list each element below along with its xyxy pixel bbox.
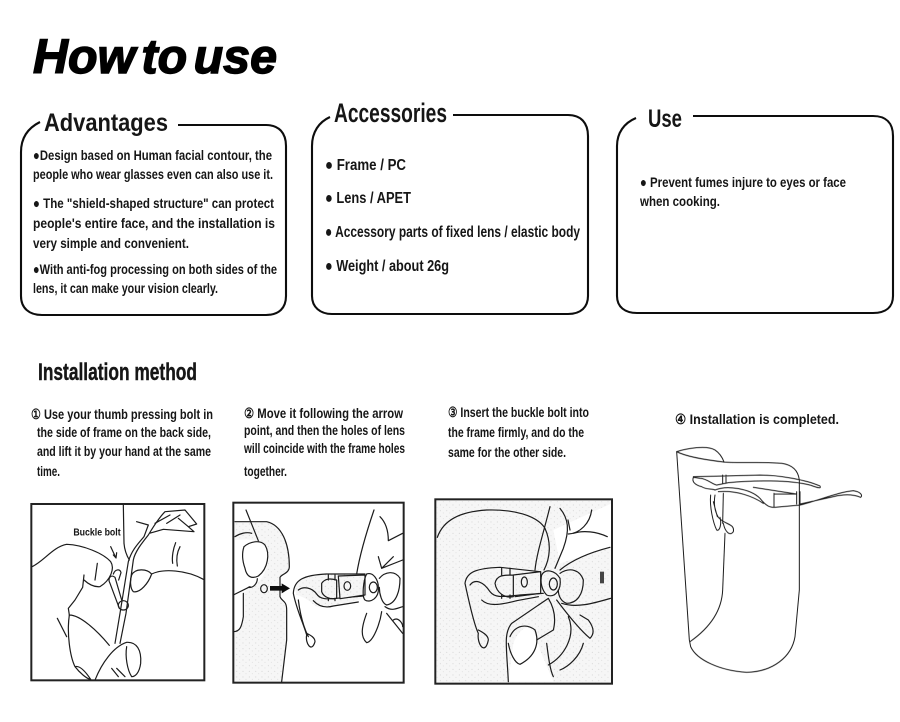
text block: step 3: ③ Insert the buckle bolt into [448,404,589,420]
text block: advantages list: people's entire face, and the installation is [33,215,275,231]
text block: step 1: and lift it by your hand at the same [37,443,211,459]
text block: step 2: ② Move it following the arrow [244,405,403,421]
text block: advantages list: ●Design based on Human facial contour, the [33,147,272,163]
text block: use description: when cooking. [639,193,720,209]
illustration: step 1 thumb pressing bolt [31,504,204,680]
text block: step 2: will coincide with the frame holes [243,440,405,456]
heading: installation method: Installation method [38,359,197,386]
panel: use [617,105,893,313]
text block: advantages list [33,147,277,296]
text block: step 4: ④ Installation is completed. [675,411,839,427]
text block: advantages list: ● The "shield-shaped structure" can protect [33,195,274,211]
text block: advantages list: people who wear glasses even can also use it. [33,166,273,182]
text block: step 3: the frame firmly, and do the [448,424,584,440]
text block: accessories list: ● Frame / PC [325,157,406,174]
text block: accessories list: ● Weight / about 26g [325,258,449,275]
text block: use description: ● Prevent fumes injure to eyes or face [640,174,846,190]
illustration: step 3 inserting buckle bolt [435,499,612,684]
illustration: step 4 completed face shield [677,447,862,672]
text block: step 2: together. [244,463,287,479]
text block: step 3 [448,404,589,460]
text block: step 1: ① Use your thumb pressing bolt in [31,406,213,422]
heading: accessories: Accessories [334,98,447,128]
text block: step 1: the side of frame on the back side, [37,424,211,440]
label: buckle bolt: Buckle bolt [73,527,121,538]
text block: advantages list: ●With anti-fog processing on both sides of the [33,261,277,277]
text block: step 1 [31,406,213,479]
title: How to use [33,31,277,84]
text block: step 3: same for the other side. [448,444,566,460]
text block: accessories list: ● Lens / APET [325,190,411,207]
text block: accessories list [325,157,580,275]
panel: accessories [312,98,588,314]
text block: step 1: time. [37,463,60,479]
text block: advantages list: lens, it can make your vision clearly. [33,280,218,296]
heading: use: Use [648,105,682,133]
text block: advantages list: very simple and convenient. [33,235,189,251]
illustration: step 2 aligning lens holes [233,503,404,683]
text block: step 2: point, and then the holes of lens [244,422,405,438]
text block: use description [639,174,846,209]
heading: advantages: Advantages [44,109,168,137]
text block: step 2 [243,405,405,479]
panel: advantages [21,109,286,315]
text block: accessories list: ● Accessory parts of fixed lens / elastic body [325,224,580,241]
